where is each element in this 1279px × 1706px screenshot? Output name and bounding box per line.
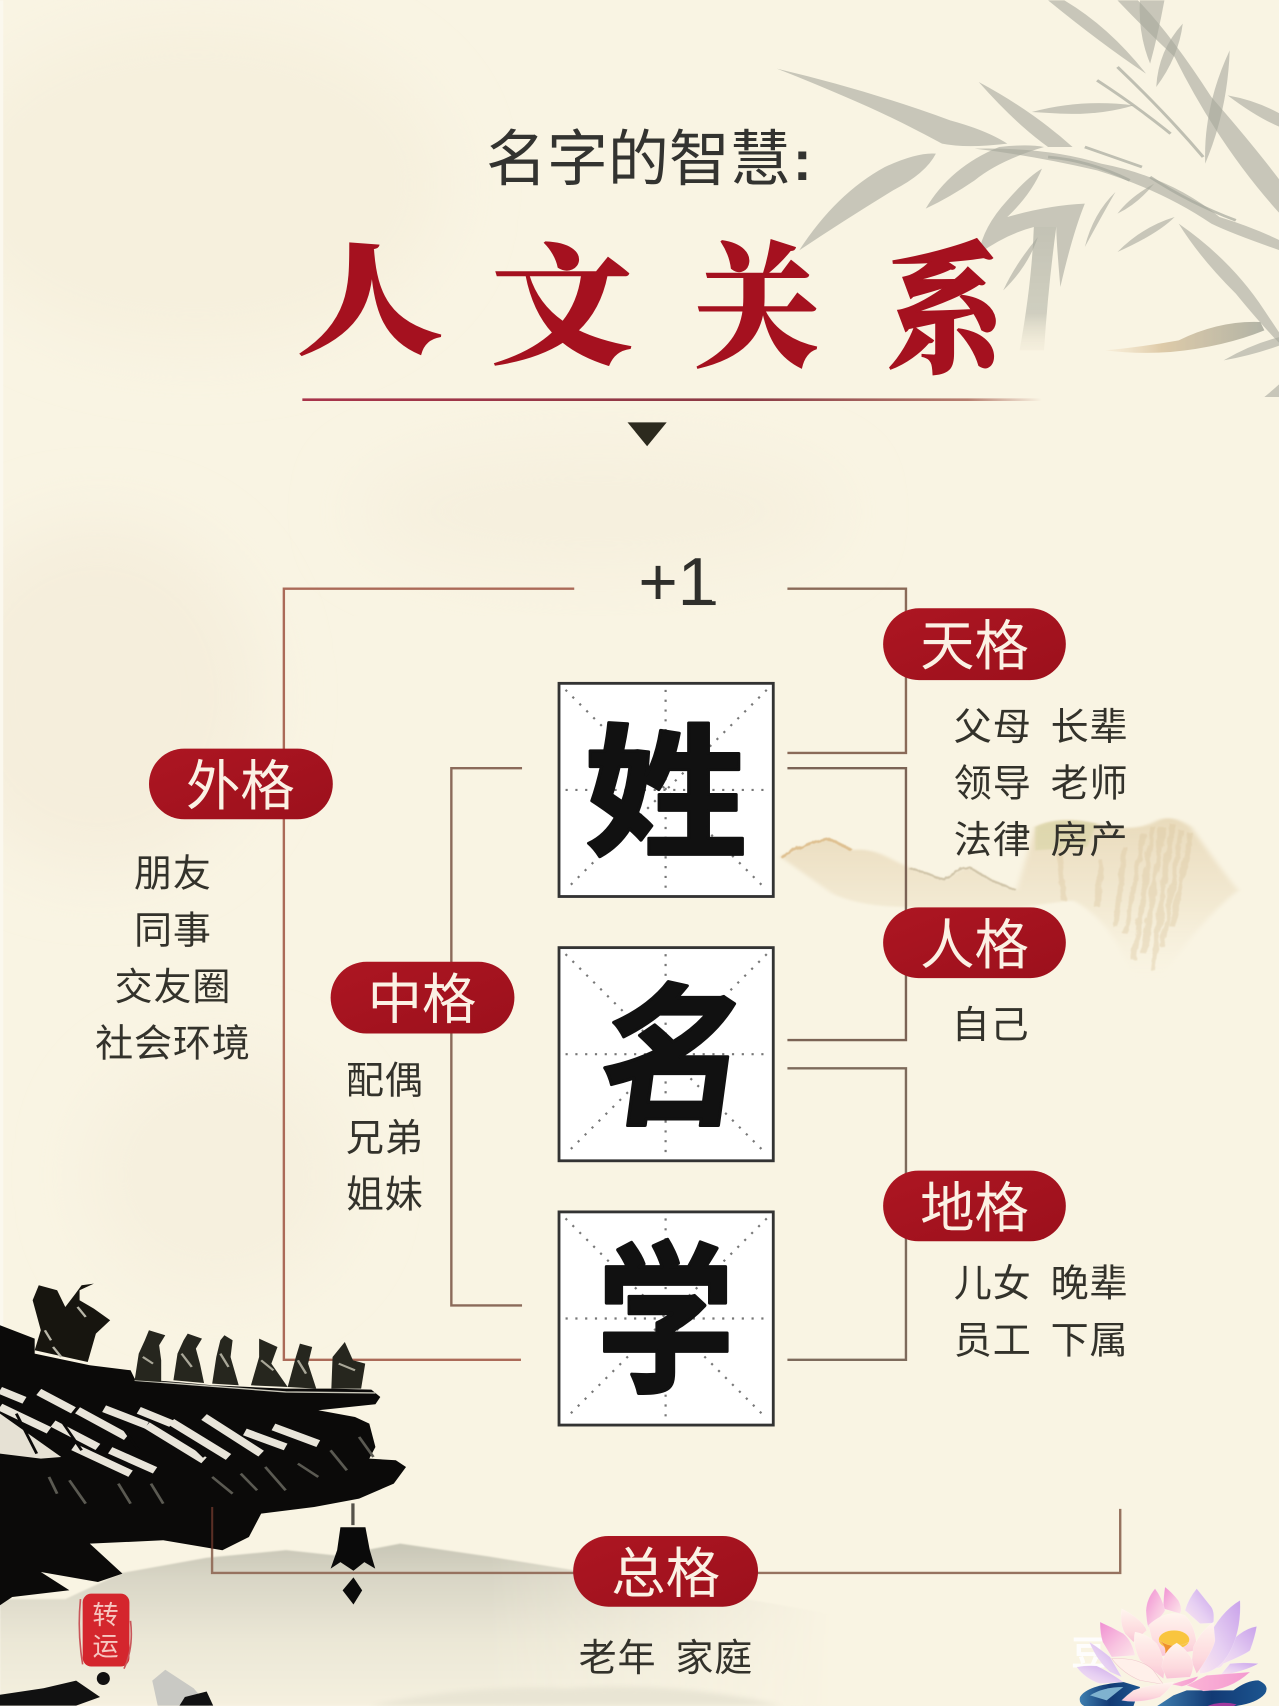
lotus petals (1077, 1587, 1258, 1701)
label: 人格 (883, 907, 1066, 978)
label: 中格 (331, 962, 514, 1034)
main title: 人 (296, 206, 443, 379)
text: 天格 relations: 领导 (954, 763, 1032, 805)
text: 中格 relations: 姐妹 (346, 1175, 424, 1217)
text: 地格 relations (954, 1264, 1128, 1362)
text: 天格 relations: 父母 (954, 707, 1032, 749)
text: 天格 relations: 长辈 (1051, 707, 1128, 749)
red seal: 转 (92, 1600, 119, 1630)
lotus leaves (1080, 1680, 1267, 1706)
watermark fragment: 豆 (1071, 1634, 1106, 1673)
text: 天格 relations: 房产 (1051, 820, 1128, 862)
hanging bell (331, 1503, 375, 1605)
roof figurines (135, 1330, 365, 1389)
main title: 文 (491, 203, 634, 390)
label: 总格 (573, 1536, 758, 1607)
text: 外格 relations: 交友圈 (115, 967, 231, 1009)
red seal: 运 (92, 1632, 119, 1662)
mountain landscape (781, 818, 1238, 978)
connector lines (212, 589, 1120, 1573)
subtitle: 名字的智慧 (486, 125, 791, 193)
text: 天格 relations: 老师 (1051, 763, 1128, 805)
bamboo illustration (777, 0, 1279, 397)
text: 总格 relations: 家庭 (675, 1638, 753, 1680)
text: 人格 relations: 自己 (952, 1005, 1029, 1047)
character box: 名: 名 (589, 936, 765, 1157)
label: 人格: 人格 (920, 915, 1029, 976)
character box: 学 (559, 1191, 773, 1427)
text: 地格 relations: 下属 (1051, 1320, 1128, 1362)
text: 外格 relations (95, 854, 251, 1065)
triangle arrow (628, 422, 667, 446)
text: 地格 relations: 晚辈 (1051, 1264, 1128, 1306)
red seal (79, 1594, 131, 1669)
text: 中格 relations (346, 1060, 424, 1217)
text: 外格 relations: 同事 (134, 910, 212, 952)
text: 地格 relations: 员工 (954, 1320, 1032, 1362)
main title (296, 199, 1008, 402)
label: 天格 (883, 608, 1066, 680)
title underline (302, 398, 1042, 401)
label: 地格: 地格 (920, 1178, 1029, 1239)
bottom-left ink fragments (0, 1670, 213, 1706)
illustration: temple roof (0, 1284, 406, 1605)
label: 中格: 中格 (368, 969, 476, 1030)
plus one: +1 (638, 545, 715, 620)
text: 总格 relations: 老年 (579, 1638, 656, 1680)
main title: 系 (887, 199, 1008, 402)
text: 总格 relations (579, 1638, 753, 1680)
text: 天格 relations (954, 707, 1128, 862)
text: 地格 relations: 儿女 (954, 1264, 1032, 1306)
text: 中格 relations: 配偶 (346, 1060, 424, 1102)
text: 外格 relations: 社会环境 (95, 1023, 251, 1065)
text: 外格 relations: 朋友 (134, 854, 212, 896)
label: 总格: 总格 (611, 1544, 720, 1605)
text: 天格 relations: 法律 (954, 820, 1032, 862)
subtitle: : (793, 129, 812, 192)
label: 地格 (883, 1171, 1066, 1241)
illustration: lotus (1077, 1587, 1267, 1706)
text: 中格 relations: 兄弟 (346, 1118, 424, 1160)
label: 外格 (149, 749, 333, 819)
character box: 学: 学 (597, 1191, 734, 1427)
character box: 姓: 姓 (584, 679, 747, 886)
main title: 关 (695, 201, 819, 395)
label: 天格: 天格 (920, 616, 1029, 677)
label: 外格: 外格 (186, 756, 295, 817)
bottom ink mountains (0, 1543, 766, 1706)
